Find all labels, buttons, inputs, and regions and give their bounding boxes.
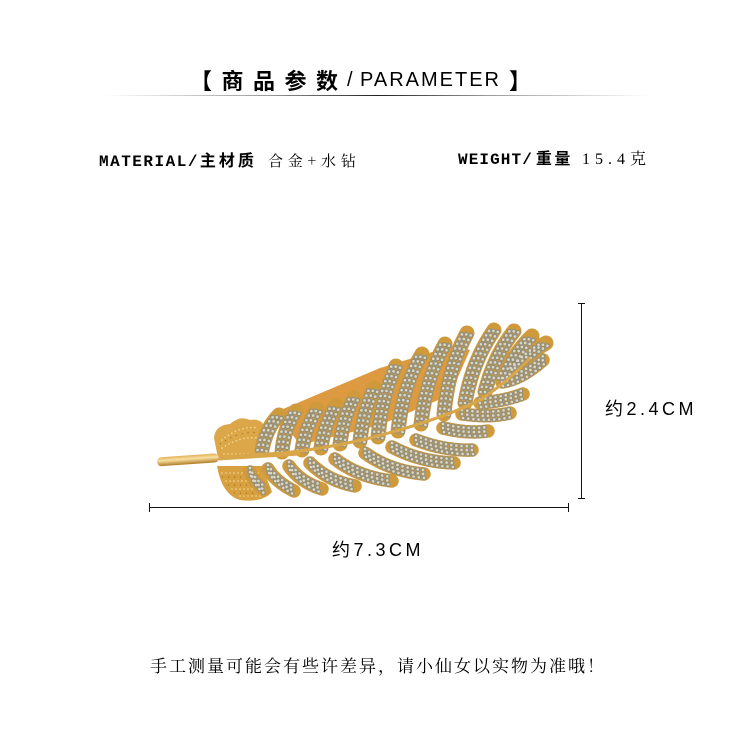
gold filigree base bbox=[214, 418, 272, 501]
rhinestones bbox=[250, 330, 550, 495]
title: 】 bbox=[509, 64, 531, 96]
footer note: 手工测量可能会有些许差异，请小仙女以实物为准哦！ bbox=[150, 657, 606, 676]
gold barbs bbox=[250, 330, 546, 491]
orange backing bbox=[276, 345, 470, 445]
title bbox=[190, 64, 531, 96]
height label: 约2.4CM bbox=[605, 399, 697, 419]
quill and rachis bbox=[157, 358, 530, 466]
title: PARAMETER bbox=[360, 69, 501, 91]
title underline bbox=[105, 95, 650, 96]
weight spec: WEIGHT/重量 15.4克 bbox=[458, 145, 651, 169]
material spec: MATERIAL/主材质 合金+水钻 bbox=[99, 147, 361, 171]
title: / bbox=[347, 69, 353, 91]
title: 【商品参数 bbox=[190, 64, 348, 96]
width label: 约7.3CM bbox=[332, 540, 424, 560]
